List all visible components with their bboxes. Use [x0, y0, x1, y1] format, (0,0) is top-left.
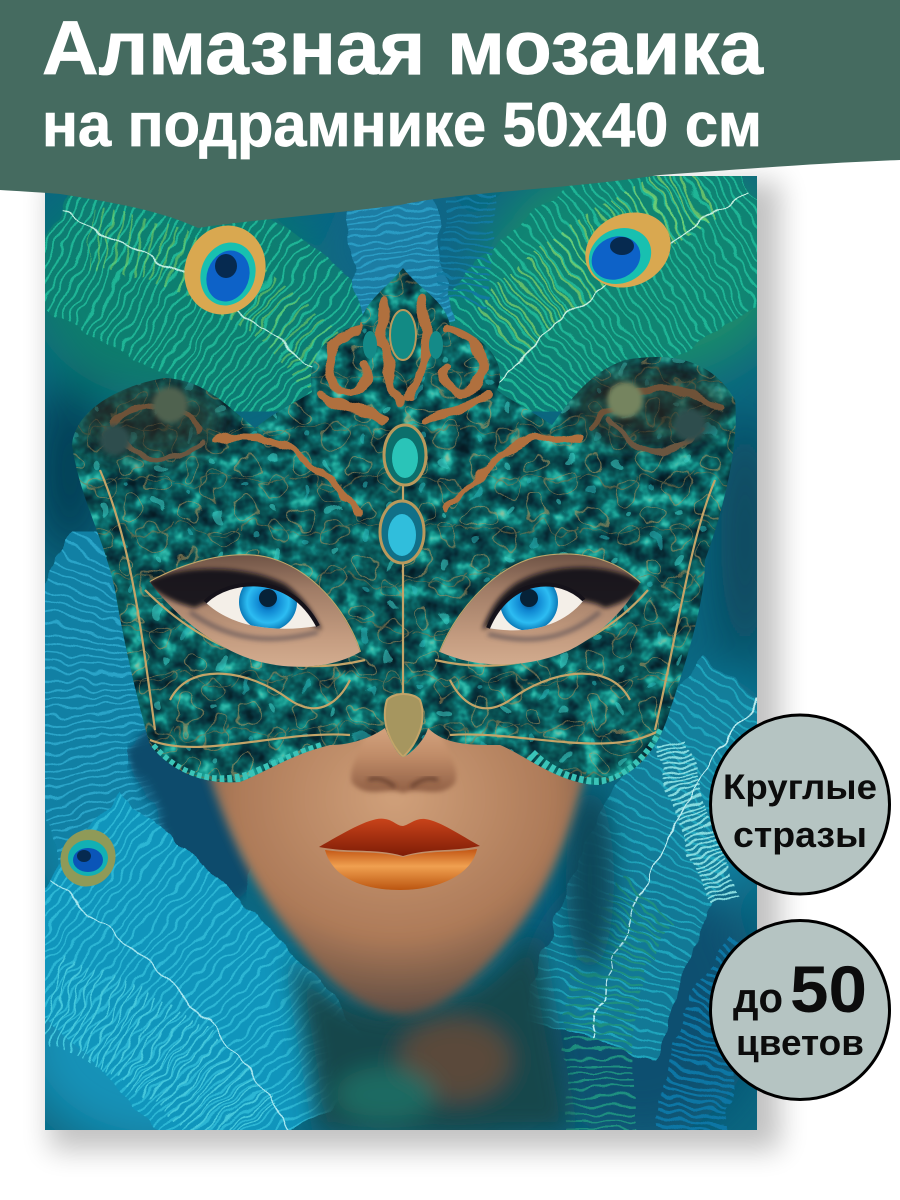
peacock eye: lower left [60, 830, 116, 886]
title [42, 6, 764, 160]
jewelled mask [60, 260, 750, 790]
mask jewel mottling [60, 260, 750, 790]
feather: top centre blue [385, 170, 470, 330]
badge: up to 50 colours: цветов [736, 1022, 864, 1063]
peacock eye: upper left [184, 226, 266, 314]
painting: peacock mask portrait [45, 176, 757, 1130]
badge: round rhinestones: Круглые [723, 768, 877, 807]
neck and collar shadow [290, 790, 614, 1130]
nose [350, 728, 458, 795]
painting background [45, 176, 757, 1130]
gold filigree: lower mask [100, 470, 715, 747]
feather: lower left cyan [50, 880, 290, 1130]
lower fringe beads [150, 748, 325, 782]
badge: up to 50 colours: до [733, 974, 783, 1021]
badge: round rhinestones [710, 715, 890, 894]
left eye [146, 569, 322, 639]
right eye [482, 567, 644, 639]
badge: up to 50 colours: 50 [790, 952, 867, 1026]
mask gold tracery [60, 260, 750, 790]
hair feathers: left side [92, 560, 130, 860]
feathers: right side teal [590, 700, 757, 1130]
canvas drop shadow [50, 182, 780, 1150]
feather: upper right green [490, 190, 750, 400]
centre gem: lower [380, 501, 424, 563]
header banner [0, 0, 900, 228]
title: на подрамнике 50х40 см [42, 91, 762, 160]
eye socket skin [150, 554, 640, 667]
nose ornament [385, 694, 423, 757]
lips [319, 819, 480, 890]
side brooches [100, 382, 706, 455]
title: Алмазная мозаика [42, 6, 764, 91]
colour washes [45, 176, 757, 1130]
badge: round rhinestones: стразы [733, 814, 867, 855]
feather group: upper [60, 170, 750, 400]
face [140, 540, 650, 1015]
wing shading [75, 365, 730, 460]
centre gem: upper [384, 425, 426, 485]
feather group: lower [50, 560, 757, 1130]
feather: upper left green [60, 210, 340, 400]
copper filigree: crown [110, 300, 720, 510]
badge: up to 50 colours [710, 920, 890, 1100]
crown gems [363, 310, 443, 360]
peacock eye: upper right [585, 212, 671, 288]
